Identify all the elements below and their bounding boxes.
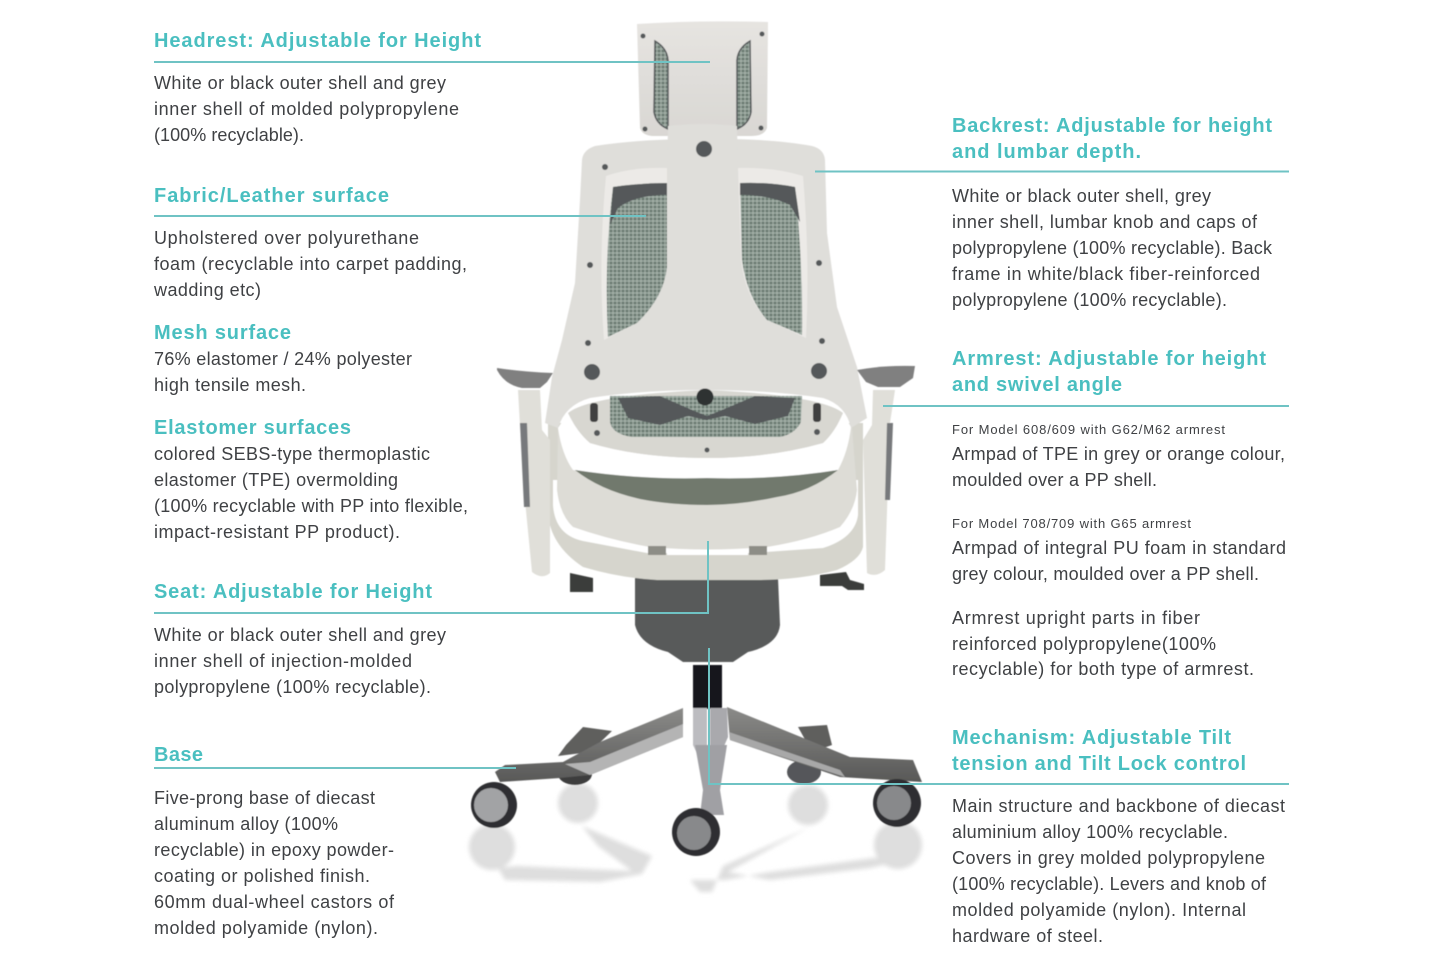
callout: base <box>154 744 516 938</box>
text: mechanism description: aluminium alloy 100% recyclable. <box>952 822 1228 842</box>
text: armrest upright parts <box>952 608 1254 679</box>
text: model 708/709 armrest: For Model 708/709 with G65 armrest <box>952 516 1191 531</box>
text: seat description: inner shell of injection-molded <box>154 651 412 671</box>
heading: mesh surface: Mesh surface <box>154 322 291 344</box>
text: headrest description: (100% recyclable). <box>154 125 304 145</box>
text: base description <box>154 788 395 938</box>
text: model 708/709 armrest <box>952 516 1286 584</box>
backrest spine top <box>667 124 738 175</box>
heading: mechanism: tension and Tilt Lock control <box>952 753 1246 775</box>
text: elastomer description: elastomer (TPE) overmolding <box>154 470 398 490</box>
text: mechanism description: hardware of steel. <box>952 926 1103 946</box>
leader line: backrest <box>815 170 1289 172</box>
text: backrest description: polypropylene (100% recyclable). <box>952 290 1227 310</box>
armrests <box>497 366 915 576</box>
text: fabric/leather description: wadding etc) <box>153 280 261 300</box>
text: mechanism description: molded polyamide (nylon). Internal <box>952 900 1246 920</box>
leader line: armrest <box>883 405 1289 407</box>
floor reflection <box>469 783 922 892</box>
backrest recess <box>601 168 667 340</box>
text: elastomer description: colored SEBS-type thermoplastic <box>154 444 430 464</box>
text: base description: recyclable) in epoxy powder- <box>154 840 394 860</box>
callout: mechanism <box>709 648 1289 946</box>
text: mechanism description: Main structure and backbone of diecast <box>952 796 1285 816</box>
text: mesh description: high tensile mesh. <box>154 375 306 395</box>
five-prong aluminium base <box>495 707 922 815</box>
seat brackets <box>648 546 767 555</box>
text: backrest description: frame in white/black fiber-reinforced <box>952 264 1260 284</box>
text: mechanism description <box>952 796 1285 946</box>
text: elastomer description <box>154 444 468 542</box>
text: base description: 60mm dual-wheel castors of <box>154 892 395 912</box>
lumbar mesh <box>610 396 802 437</box>
text: mechanism description: Covers in grey molded polypropylene <box>952 848 1265 868</box>
text: model 708/709 armrest: Armpad of integral PU foam in standard <box>952 538 1286 558</box>
text: mechanism description: (100% recyclable). Levers and knob of <box>952 874 1267 894</box>
text: fabric/leather description <box>153 228 467 300</box>
heading: base: Base <box>154 744 203 766</box>
backrest shell <box>545 139 867 428</box>
text: backrest description: polypropylene (100% recyclable). Back <box>952 238 1273 258</box>
text: elastomer description: (100% recyclable with PP into flexible, <box>154 496 468 516</box>
gas lift cylinder housing <box>635 578 780 662</box>
text: model 708/709 armrest: grey colour, moulded over a PP shell. <box>952 564 1259 584</box>
heading: elastomer surfaces: Elastomer surfaces <box>154 417 351 439</box>
castors <box>471 779 921 856</box>
heading: armrest: Armrest: Adjustable for height <box>952 348 1266 370</box>
callout: backrest <box>815 115 1289 310</box>
leader line: fabric/leather <box>154 215 646 217</box>
heading: backrest <box>952 115 1272 163</box>
text: backrest description <box>952 186 1273 310</box>
callout: elastomer surfaces <box>154 417 468 542</box>
callout: headrest <box>154 30 710 145</box>
white gap between back and seat <box>558 413 851 480</box>
text: base description: molded polyamide (nylon). <box>154 918 378 938</box>
heading: backrest: Backrest: Adjustable for height <box>952 115 1272 137</box>
heading: fabric/leather: Fabric/Leather surface <box>154 185 389 207</box>
text: elastomer description: impact-resistant PP product). <box>154 522 400 542</box>
text: model 608/609 armrest: moulded over a PP shell. <box>952 470 1157 490</box>
text: fabric/leather description: foam (recyclable into carpet padding, <box>154 254 467 274</box>
text: base description: coating or polished finish. <box>154 866 370 886</box>
text: seat description: White or black outer shell and grey <box>154 625 446 645</box>
text: backrest description: inner shell, lumbar knob and caps of <box>952 212 1258 232</box>
text: model 608/609 armrest <box>952 422 1285 490</box>
seat mesh <box>575 470 838 505</box>
heading: backrest: and lumbar depth. <box>952 141 1141 163</box>
text: armrest upright parts: reinforced polypropylene(100% <box>952 634 1216 654</box>
callout: mesh surface <box>154 322 412 395</box>
leader line: mechanism <box>709 648 1289 784</box>
heading: mechanism <box>952 727 1246 775</box>
text: headrest description <box>154 73 459 145</box>
callout: seat <box>154 541 708 697</box>
text: fabric/leather description: Upholstered over polyurethane <box>154 228 419 248</box>
text: seat description: polypropylene (100% recyclable). <box>154 677 431 697</box>
text: mesh description <box>154 349 412 395</box>
leader line: base <box>154 767 516 769</box>
back legs of base <box>558 725 832 785</box>
text: seat description <box>154 625 446 697</box>
levers under seat <box>570 572 864 592</box>
text: mesh description: 76% elastomer / 24% polyester <box>154 349 412 369</box>
heading: armrest: and swivel angle <box>952 374 1122 396</box>
lumbar bar <box>568 390 843 458</box>
white gap under seat <box>553 480 858 553</box>
callout: armrest <box>883 348 1289 679</box>
heading: mechanism: Mechanism: Adjustable Tilt <box>952 727 1231 749</box>
text: model 608/609 armrest: For Model 608/609 with G62/M62 armrest <box>952 422 1225 437</box>
screws and knobs <box>584 32 827 452</box>
illustration: office chair, rear view <box>469 21 922 892</box>
text: backrest description: White or black outer shell, grey <box>952 186 1211 206</box>
leader line: seat <box>154 541 708 613</box>
leader line: headrest <box>154 61 710 63</box>
text: base description: aluminum alloy (100% <box>154 814 338 834</box>
heading: seat: Seat: Adjustable for Height <box>154 581 432 603</box>
text: base description: Five-prong base of diecast <box>154 788 375 808</box>
lower seat hoop <box>548 423 863 580</box>
text: armrest upright parts: recyclable) for both type of armrest. <box>952 659 1254 679</box>
seat shell <box>557 427 857 550</box>
heading: armrest <box>952 348 1266 396</box>
text: headrest description: inner shell of molded polypropylene <box>154 99 459 119</box>
callout: fabric/leather surface <box>153 185 646 300</box>
headrest <box>637 21 768 136</box>
heading: headrest: Headrest: Adjustable for Height <box>154 30 481 52</box>
text: model 608/609 armrest: Armpad of TPE in grey or orange colour, <box>952 444 1285 464</box>
column <box>693 665 722 709</box>
text: headrest description: White or black outer shell and grey <box>154 73 446 93</box>
backrest mesh panels <box>607 183 667 337</box>
text: armrest upright parts: Armrest upright parts in fiber <box>952 608 1200 628</box>
